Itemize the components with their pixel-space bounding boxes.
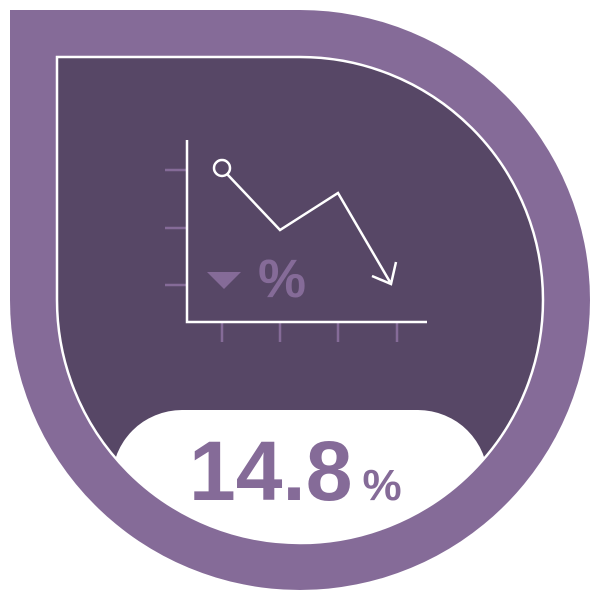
panel: inner dark teardrop bbox=[57, 57, 543, 600]
icon: down triangle bbox=[207, 272, 241, 289]
value label: 14.8% bbox=[189, 424, 402, 518]
chart: declining line graph: % bbox=[258, 249, 306, 309]
chart: declining line graph bbox=[165, 140, 427, 342]
